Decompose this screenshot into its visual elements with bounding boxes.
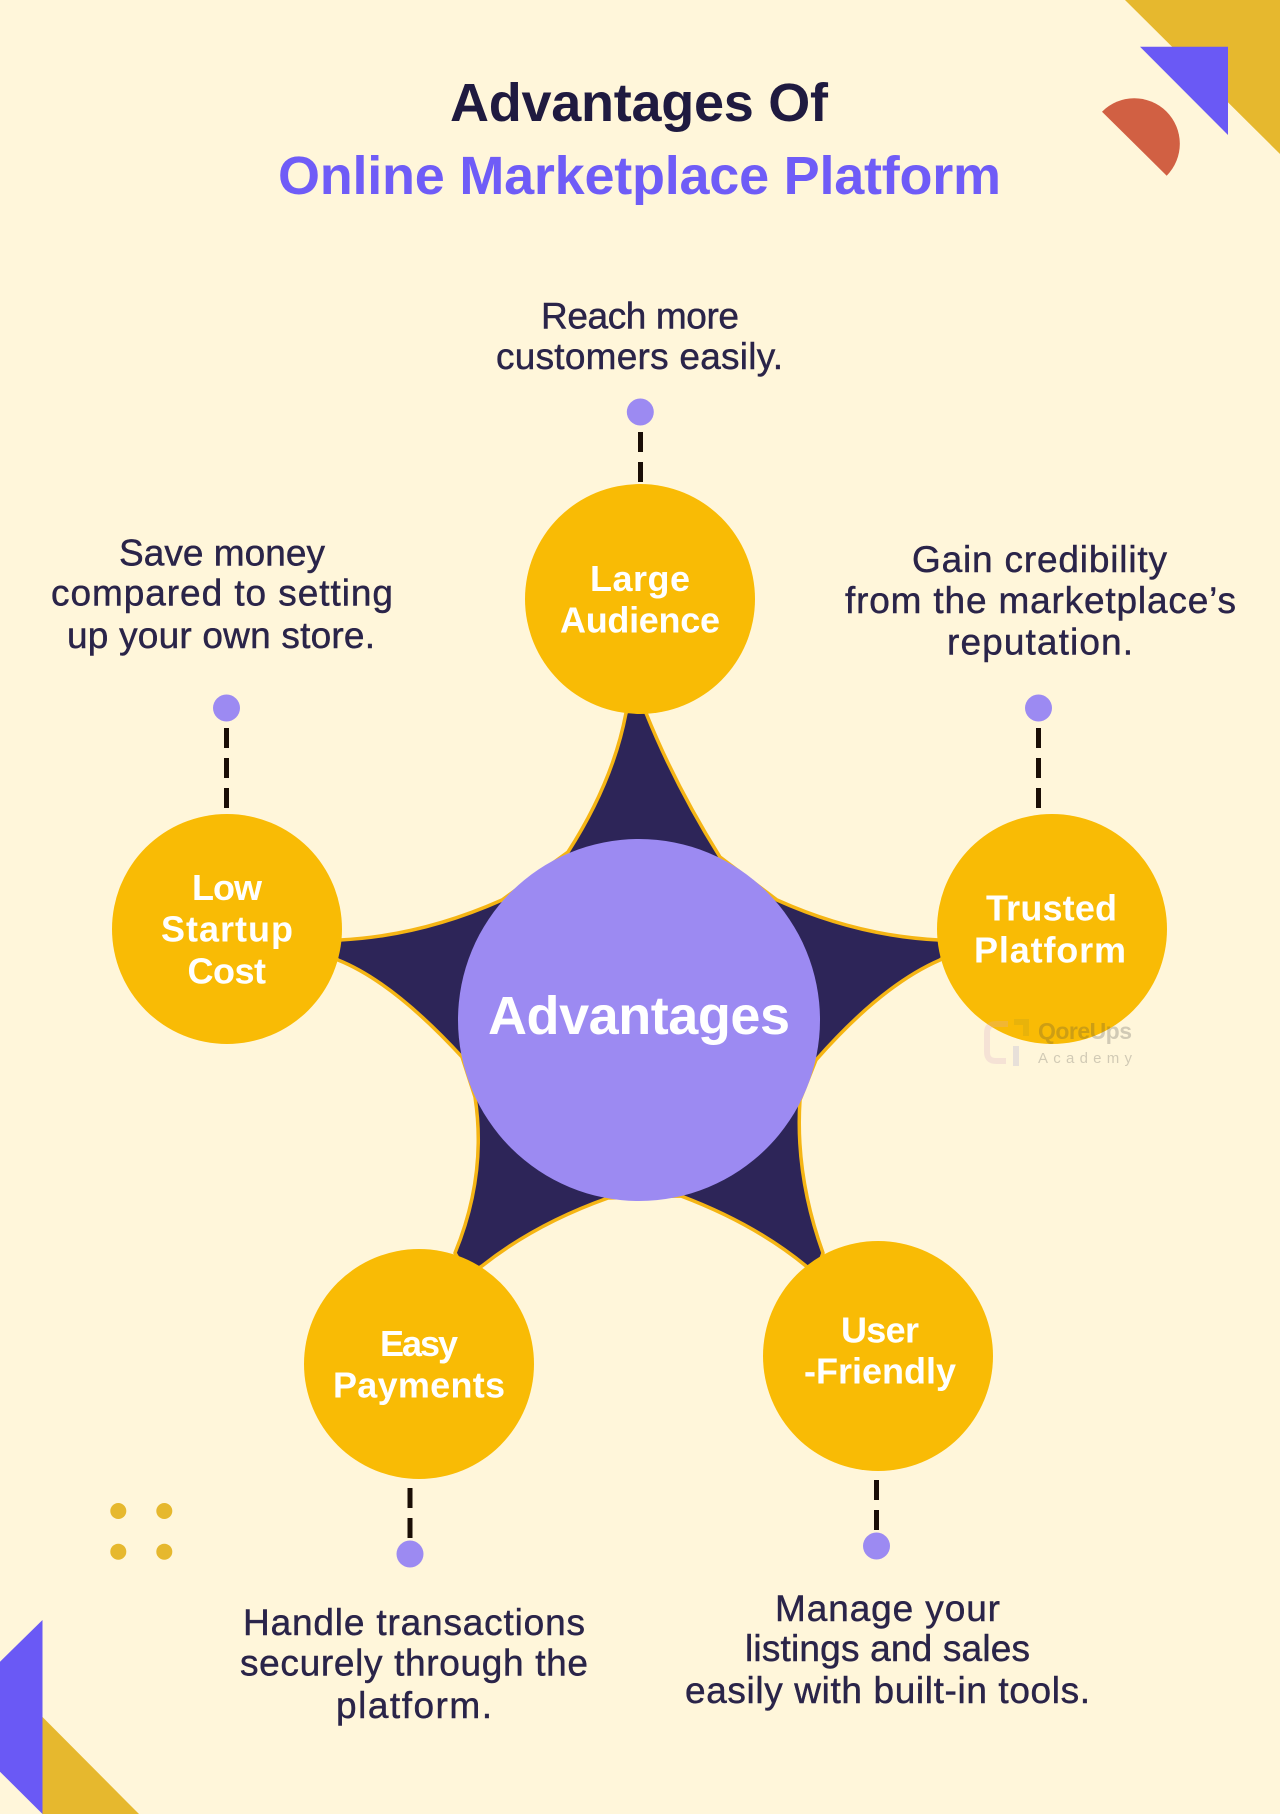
central hub: Advantages [458,839,820,1201]
corner decoration: top right [1102,0,1280,176]
connector: Easy Payments [396,1488,424,1568]
node: Low Startup Cost: Low [192,867,263,908]
node: Low Startup Cost: Startup [161,908,293,950]
watermark: QoreUps Academy: Academy [1038,1050,1132,1067]
text: Trusted Platform description: from the marketplace’s [845,580,1236,621]
text: User-Friendly description: easily with built-in tools. [685,1670,1090,1711]
node: Low Startup Cost [112,814,342,1044]
node: Large Audience: Large [590,558,690,599]
text: Low Startup Cost description: compared to setting [51,572,393,614]
star shape behind the hub [325,700,955,1275]
text: Easy Payments description: Handle transactions [243,1602,585,1643]
text: Low Startup Cost description [51,532,393,656]
connector: Low Startup Cost [213,694,240,808]
node: Easy Payments: Easy [380,1323,458,1364]
text: Trusted Platform description: Gain credibility [912,539,1168,580]
node: Low Startup Cost: Cost [188,950,266,992]
text: Easy Payments description: platform. [336,1685,492,1726]
text: Easy Payments description [240,1602,588,1726]
node: Trusted Platform: Platform [974,930,1126,970]
connector: User-Friendly [863,1480,890,1560]
text: User-Friendly description: Manage your [775,1588,1000,1629]
text: Low Startup Cost description: up your own store. [67,615,375,656]
text: Easy Payments description: securely through the [240,1642,588,1684]
text: Trusted Platform description [845,539,1236,662]
node: Large Audience [525,484,755,714]
title: Online Marketplace Platform [278,146,1001,206]
node: Easy Payments [304,1249,534,1479]
connector: Large Audience [627,398,654,482]
connector: Trusted Platform [1025,694,1052,808]
node: Trusted Platform [937,814,1167,1044]
central hub: Advantages: Advantages [488,986,790,1046]
text: Low Startup Cost description: Save money [119,532,326,574]
node: User-Friendly: User [841,1310,919,1350]
text: User-Friendly description: listings and sales [745,1628,1030,1669]
corner decoration: bottom left [0,1620,139,1814]
text: User-Friendly description [685,1588,1090,1711]
title: Advantages Of [450,73,829,133]
text: Large Audience description [496,296,783,377]
decoration: four dots [110,1503,172,1560]
watermark: QoreUps Academy: QoreUps [1038,1018,1132,1044]
node: Trusted Platform: Trusted [986,888,1117,928]
node: User-Friendly [763,1241,993,1471]
text: Large Audience description: Reach more [541,296,739,336]
text: Trusted Platform description: reputation. [947,622,1133,662]
title [278,73,1001,206]
text: Large Audience description: customers easily. [496,336,783,377]
watermark: QoreUps Academy [987,1018,1132,1067]
node: User-Friendly: -Friendly [804,1350,956,1392]
node: Easy Payments: Payments [333,1364,505,1406]
node: Large Audience: Audience [560,600,720,640]
